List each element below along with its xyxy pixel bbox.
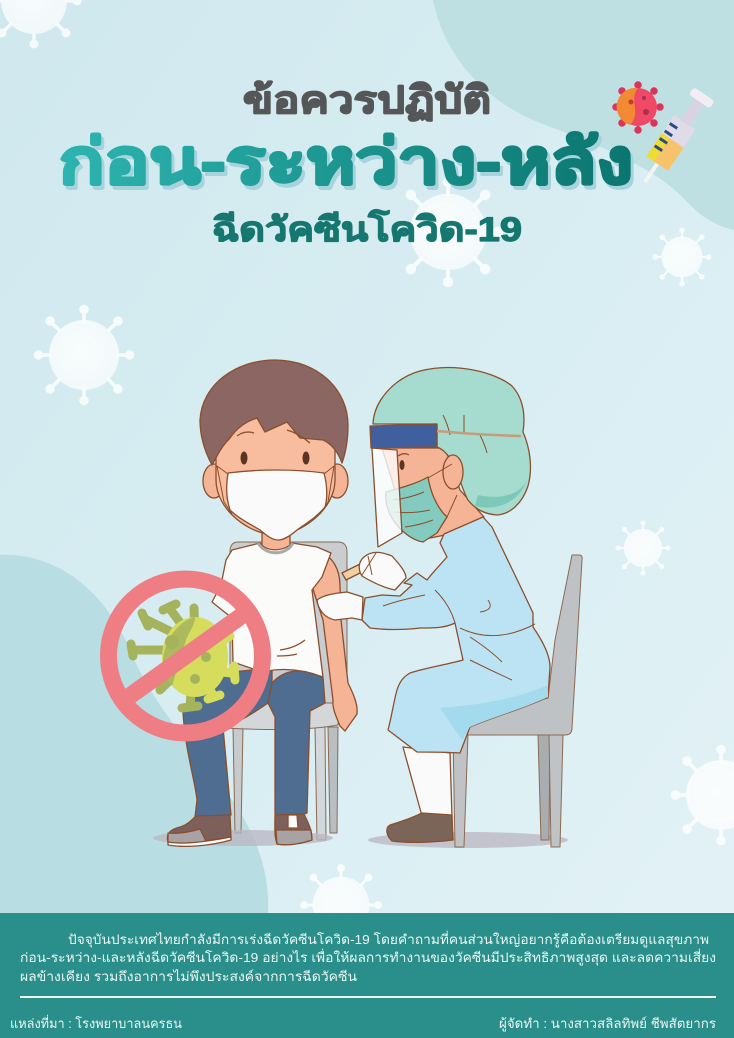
face (216, 410, 335, 535)
decorative virus: right upper (653, 228, 711, 286)
no-virus prohibition sign (108, 579, 262, 733)
face mask (227, 470, 327, 540)
shield band (370, 424, 437, 448)
heading line 1: ข้อควรปฏิบัติ (243, 80, 491, 122)
intro paragraph: ผลข้างเคียง รวมถึงอาการไม่พึงประสงค์จากการฉีดวัคซีน (20, 969, 357, 984)
hair (200, 360, 348, 465)
decorative virus: right lower (671, 745, 734, 845)
ear (443, 455, 463, 489)
jeans (183, 668, 272, 818)
icon: red virus (614, 82, 662, 132)
intro paragraph: ปัจจุบันประเทศไทยกำลังมีการเร่งฉีดวัคซีนโควิด-19 โดยคำถามที่คนส่วนใหญ่อยากรู้คือต้องเตรียมดูแลสุขภาพ (68, 931, 709, 948)
background blob: bottom left (0, 555, 268, 913)
decorative virus: right middle (615, 520, 671, 576)
intro paragraph: ก่อน-ระหว่าง-และหลังฉีดวัคซีนโควิด-19 อย่างไร เพื่อให้ผลการทำงานของวัคซีนมีประสิทธิภาพสูงสุด และลดความเสี่ยง (20, 949, 716, 966)
syringe in hand (342, 561, 370, 580)
intro paragraph (20, 931, 716, 984)
decorative virus: bottom centre (300, 864, 382, 946)
upper glove (359, 552, 406, 590)
neck and face (382, 448, 484, 540)
footer panel (0, 913, 734, 1038)
illustration: patient chair (224, 542, 347, 840)
decorative virus: top left (0, 0, 82, 48)
heading line 2: ก่อน-ระหว่าง-หลัง (62, 132, 636, 201)
source credit: แหล่งที่มา : โรงพยาบาลนครธน (10, 1015, 182, 1031)
decorative virus: behind title (393, 177, 503, 287)
surgical mask (386, 477, 447, 542)
icon: syringe (634, 87, 715, 189)
prohibition ring and slash (108, 579, 262, 733)
gown (362, 517, 550, 753)
ears (203, 464, 225, 498)
illustration: nurse (317, 368, 550, 842)
cap (373, 368, 530, 515)
arm (310, 553, 357, 731)
face shield (372, 448, 402, 547)
heading line 2: ก่อน-ระหว่าง-หลัง (59, 128, 633, 197)
shoe (387, 813, 453, 842)
background blob: top right (433, 0, 734, 230)
illustration: floor shadows (153, 830, 568, 848)
author credit: ผู้จัดทำ : นางสาวสลิลทิพย์ ชีพสัตยากร (499, 1016, 716, 1032)
neck (262, 525, 290, 552)
decorative virus: left (34, 305, 134, 405)
sock (403, 747, 452, 817)
title block (59, 80, 636, 249)
heading line 3: ฉีดวัคซีนโควิด-19 (212, 209, 522, 249)
virus (131, 604, 235, 708)
glove fingers (362, 553, 376, 575)
eyes (240, 452, 310, 464)
lower glove (317, 592, 363, 620)
shoes (167, 815, 231, 844)
illustration: nurse chair (453, 555, 582, 847)
illustration: patient (167, 360, 357, 846)
t-shirt (212, 543, 331, 677)
